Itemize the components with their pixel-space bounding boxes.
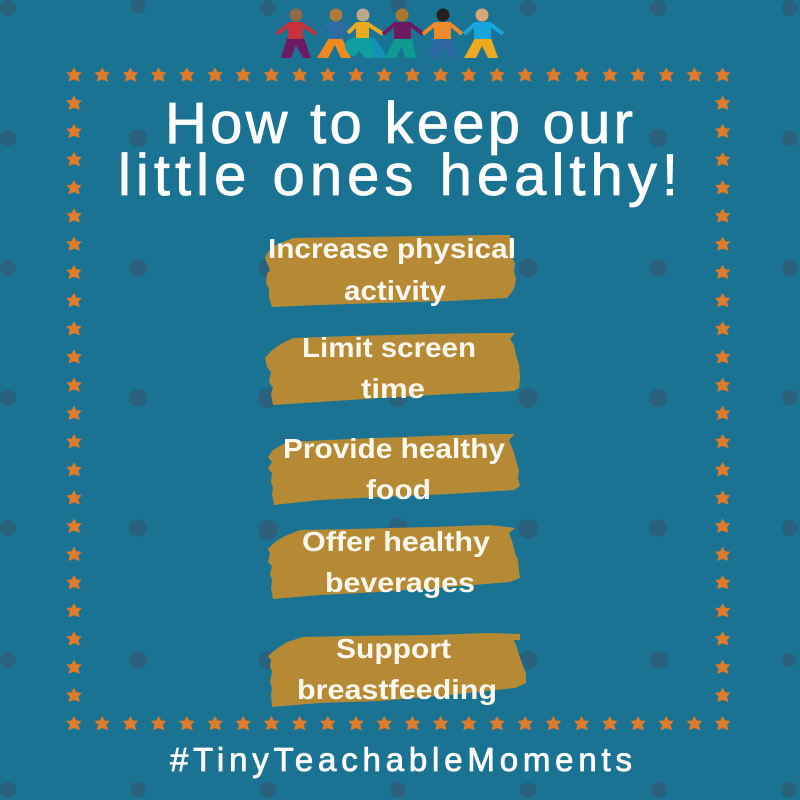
list item: offer healthy beverages [268,525,520,599]
brush stroke [265,235,516,307]
list item: limit screen time: Limit screen [302,332,476,363]
title [118,91,678,208]
list item: increase physical activity: Increase physical [268,233,516,264]
brush stroke [268,633,526,707]
list item: limit screen time: time [361,373,425,404]
list item: provide healthy food: Provide healthy [283,433,505,464]
list item: support breastfeeding: Support [336,633,451,664]
child 1 [277,8,316,58]
child 2 [317,8,356,58]
title: little ones healthy! [118,143,678,208]
star border [60,61,737,738]
list item: increase physical activity [265,233,516,307]
hashtag: #TinyTeachableMoments [170,741,632,778]
child 4 [383,8,423,58]
list item: offer healthy beverages: Offer healthy [302,526,490,557]
icon: row of paper-chain children [277,8,503,58]
brush stroke [265,333,520,405]
list item: offer healthy beverages: beverages [325,567,475,598]
list item: provide healthy food [268,433,520,505]
brush stroke [268,525,520,599]
list item: limit screen time [265,332,520,405]
list item: increase physical activity: activity [344,275,446,306]
title: How to keep our [165,91,633,156]
list item: support breastfeeding [268,633,526,707]
list item: provide healthy food: food [366,474,431,505]
child 3 [345,8,387,58]
child 5 [423,8,462,58]
brush stroke [268,434,520,505]
child 6 [464,8,503,58]
list item: support breastfeeding: breastfeeding [297,674,497,705]
